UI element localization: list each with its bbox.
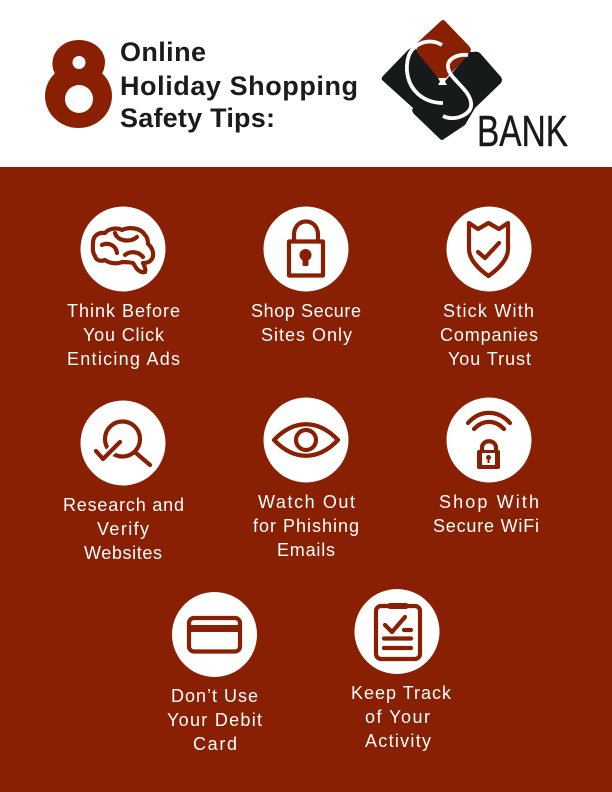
icon: padlock (289, 222, 323, 276)
tip 7: don't use your debit card (167, 592, 262, 754)
icon: clipboard checklist (376, 603, 420, 659)
label: Shop With (439, 492, 539, 512)
icon: magnifier with check (96, 422, 150, 465)
label: Enticing Ads (67, 349, 180, 369)
tip 5: watch out for phishing emails (253, 398, 359, 560)
icon: credit card (188, 618, 241, 652)
label: for Phishing (253, 516, 359, 536)
label: Think Before (67, 301, 180, 321)
label: Don’t Use (171, 686, 258, 706)
tip 6: shop with secure wifi (433, 398, 539, 536)
label: You Trust (448, 349, 531, 369)
header panel (0, 0, 612, 167)
red background panel (0, 167, 612, 792)
label: Keep Track (351, 683, 452, 703)
tip 8: keep track of your activity (351, 589, 452, 751)
label: of Your (365, 707, 430, 727)
label: Stick With (443, 301, 534, 321)
label: Research and (63, 495, 184, 515)
tip 4: research and verify websites (63, 400, 184, 563)
label: Watch Out (258, 492, 355, 512)
label (63, 495, 184, 563)
numeral 8: 8 (47, 19, 110, 149)
label (440, 301, 538, 369)
title: Holiday Shopping (120, 71, 358, 101)
label (253, 492, 359, 560)
label (167, 686, 262, 754)
label (351, 683, 452, 751)
tip 3: stick with companies you trust (440, 206, 538, 369)
icon: brain (93, 228, 153, 272)
label (433, 492, 539, 536)
label: Emails (277, 540, 335, 560)
icon: shield with check (469, 223, 508, 276)
label: Card (193, 734, 237, 754)
label: Shop Secure (251, 301, 361, 321)
label: Verify (97, 519, 149, 539)
label: Activity (365, 731, 431, 751)
title: Online (120, 37, 206, 67)
tip 2: shop secure sites only (251, 206, 361, 345)
title (120, 37, 358, 133)
label: Your Debit (167, 710, 262, 730)
icon: eye (274, 424, 338, 456)
label: Websites (84, 543, 162, 563)
label: Companies (440, 325, 538, 345)
label: Secure WiFi (433, 516, 539, 536)
title: Safety Tips: (120, 103, 275, 133)
label: You Click (83, 325, 165, 345)
logo: CS Bank (382, 20, 568, 156)
label (67, 301, 180, 369)
tip 1: think before you click (67, 206, 180, 369)
label (251, 301, 361, 345)
label: Sites Only (261, 325, 352, 345)
logo: CS Bank: BANK (477, 107, 568, 156)
icon: wifi padlock (468, 413, 510, 469)
